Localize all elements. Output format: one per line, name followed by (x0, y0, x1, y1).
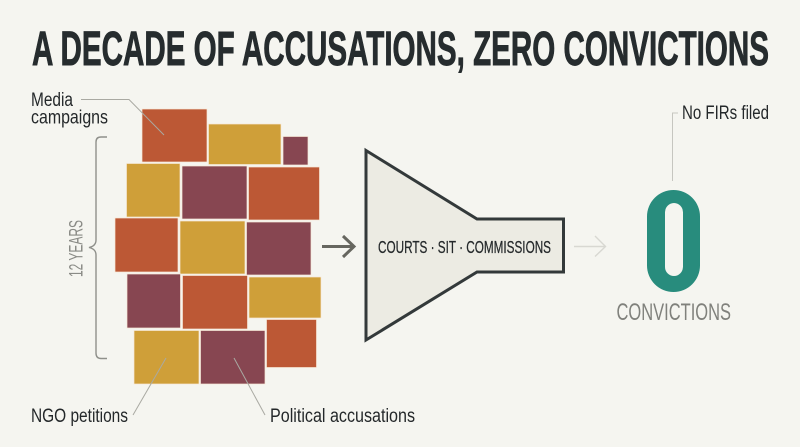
bracket: 12 years: 12 YEARS (66, 220, 88, 277)
funnel: courts, SIT, commissions: COURTS · SIT · COMMISSIONS (378, 237, 551, 257)
arrow: out of funnel (574, 236, 606, 256)
label: political accusations (234, 358, 415, 427)
label: media campaigns (31, 90, 164, 135)
label: political accusations: Political accusations (270, 406, 415, 427)
annotation: no FIRs filed: No FIRs filed (682, 103, 769, 124)
label: NGO petitions: NGO petitions (31, 406, 128, 427)
funnel: courts, SIT, commissions (366, 150, 564, 340)
block stack of accusations (115, 109, 321, 384)
big zero: 0 (644, 167, 704, 319)
convictions label: CONVICTIONS (616, 299, 731, 326)
big zero (647, 190, 700, 292)
label: media campaigns: campaigns (31, 108, 108, 128)
label: NGO petitions (31, 358, 166, 427)
bracket: 12 years (66, 137, 107, 358)
label: media campaigns: Media (31, 90, 73, 111)
arrow: into funnel (322, 236, 354, 257)
annotation: no FIRs filed (672, 103, 769, 181)
